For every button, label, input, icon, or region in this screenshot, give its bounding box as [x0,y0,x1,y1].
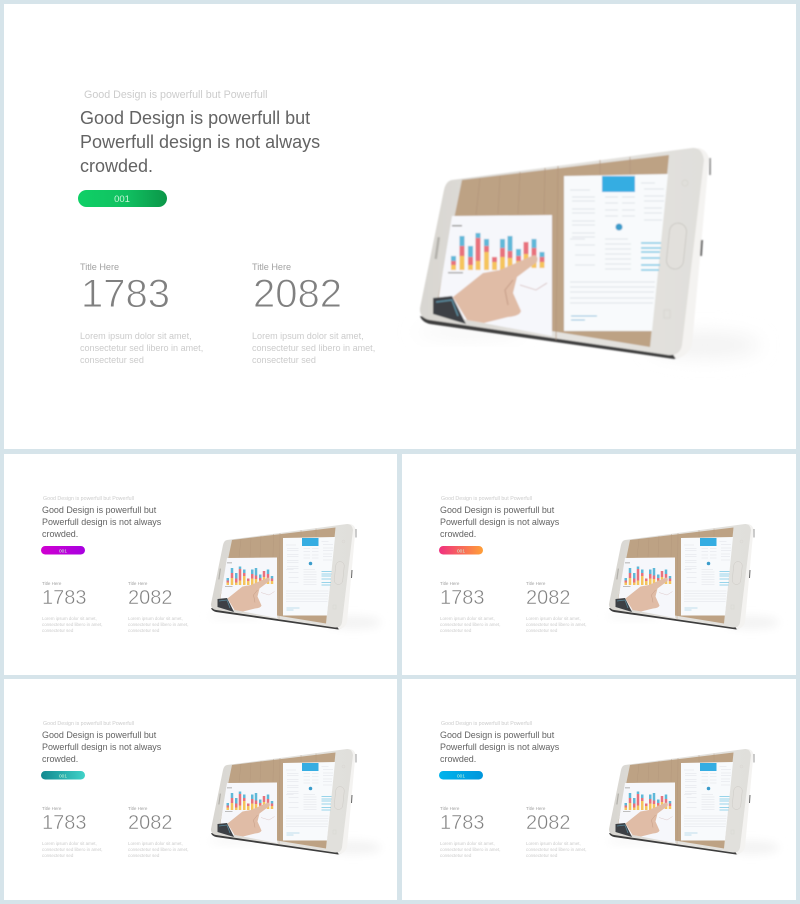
stat: 1783: Title Here [80,262,119,272]
heading: crowded. [80,156,153,176]
stat: 1783: Lorem ipsum dolor sit amet, [42,841,97,846]
stat: 2082: consectetur sed libero in amet, [252,343,375,353]
heading: crowded. [440,754,476,764]
pill badge [439,546,483,554]
panel: main green slide [4,4,796,449]
stat: 1783: consectetur sed libero in amet, [440,622,500,627]
stat: 1783: Title Here [42,806,62,811]
stat: 2082: Lorem ipsum dolor sit amet, [252,331,364,341]
stat: 2082: consectetur sed [252,355,316,365]
stat: 2082: Lorem ipsum dolor sit amet, [526,841,581,846]
phone mockup [208,524,381,630]
pill badge: 001 [457,548,465,554]
stat: 1783 [440,806,500,858]
stat: 2082: consectetur sed libero in amet, [526,622,586,627]
stat: 2082: 2082 [128,587,172,609]
phone mockup [606,524,779,630]
stat: 1783: Title Here [42,581,62,586]
stat: 2082: Title Here [128,806,148,811]
pill badge: 001 [59,548,67,554]
stat: 2082: 2082 [526,812,570,834]
stat: 2082 [128,581,188,633]
pill badge [41,546,85,554]
stat: 2082: 2082 [128,812,172,834]
panel: blue slide [402,679,796,900]
stat: 2082: consectetur sed libero in amet, [128,622,188,627]
stat: 1783: consectetur sed [42,853,74,858]
heading: Powerfull design is not always [42,742,162,752]
stat: 2082: consectetur sed libero in amet, [128,847,188,852]
subtitle: Good Design is powerfull but Powerfull [441,496,532,502]
stat: 2082: Title Here [252,262,291,272]
stat: 1783: 1783 [42,812,86,834]
stat: 1783 [42,806,102,858]
stat: 1783: consectetur sed [42,628,74,633]
heading: Powerfull design is not always [440,517,560,527]
stat: 1783: consectetur sed libero in amet, [80,343,203,353]
stat: 2082: Lorem ipsum dolor sit amet, [128,616,183,621]
stat: 2082: 2082 [253,272,342,316]
stat: 1783 [440,581,500,633]
pill badge: 001 [457,774,465,780]
subtitle: Good Design is powerfull but Powerfull [43,496,134,502]
stat: 1783: consectetur sed libero in amet, [42,622,102,627]
stat: 1783: Lorem ipsum dolor sit amet, [42,616,97,621]
pill badge [439,771,483,780]
stat: 1783: 1783 [440,812,484,834]
heading: crowded. [42,754,78,764]
subtitle: Good Design is powerfull but Powerfull [84,89,268,101]
stat: 2082: consectetur sed [526,628,558,633]
stat: 2082 [252,262,375,365]
stat: 1783: Title Here [440,806,460,811]
stat: 1783: Lorem ipsum dolor sit amet, [440,841,495,846]
stat: 2082: Lorem ipsum dolor sit amet, [526,616,581,621]
stat: 1783: Lorem ipsum dolor sit amet, [80,331,192,341]
stat: 1783: 1783 [42,587,86,609]
stat: 1783: consectetur sed [80,355,144,365]
stat: 2082: Title Here [526,806,546,811]
stat: 1783: consectetur sed libero in amet, [42,847,102,852]
stat: 1783: consectetur sed libero in amet, [440,847,500,852]
stat: 1783 [42,581,102,633]
heading: Good Design is powerfull but [440,730,555,740]
heading: Good Design is powerfull but [42,730,157,740]
stat: 2082: consectetur sed libero in amet, [526,847,586,852]
stat: 1783: consectetur sed [440,853,472,858]
stat: 2082: Title Here [128,581,148,586]
stat: 1783: consectetur sed [440,628,472,633]
heading: crowded. [440,529,476,539]
subtitle: Good Design is powerfull but Powerfull [43,721,134,727]
stat: 2082 [128,806,188,858]
stat: 1783: Lorem ipsum dolor sit amet, [440,616,495,621]
heading: crowded. [42,529,78,539]
stat: 2082: consectetur sed [526,853,558,858]
stat: 2082: Title Here [526,581,546,586]
stat: 1783: 1783 [440,587,484,609]
stat: 2082 [526,806,586,858]
pill badge [41,771,85,780]
pill badge: 001 [59,774,67,780]
stat: 2082: consectetur sed [128,628,160,633]
heading: Powerfull design is not always [80,132,320,152]
stat: 2082: Lorem ipsum dolor sit amet, [128,841,183,846]
panel: orange slide [402,454,796,675]
heading: Good Design is powerfull but [42,505,157,515]
stat: 2082: consectetur sed [128,853,160,858]
phone mockup [415,148,760,359]
phone mockup [606,749,779,854]
subtitle: Good Design is powerfull but Powerfull [441,721,532,727]
heading: Powerfull design is not always [440,742,560,752]
pill badge [78,190,167,207]
heading: Powerfull design is not always [42,517,162,527]
heading: Good Design is powerfull but [440,505,555,515]
stat: 2082: 2082 [526,587,570,609]
panel: magenta slide [4,454,397,675]
pill badge: 001 [114,194,130,205]
panel: teal slide [4,679,397,900]
heading: Good Design is powerfull but [80,108,310,128]
stat: 2082 [526,581,586,633]
stat: 1783 [80,262,203,365]
stat: 1783: Title Here [440,581,460,586]
stat: 1783: 1783 [81,272,170,316]
phone mockup [208,749,381,854]
